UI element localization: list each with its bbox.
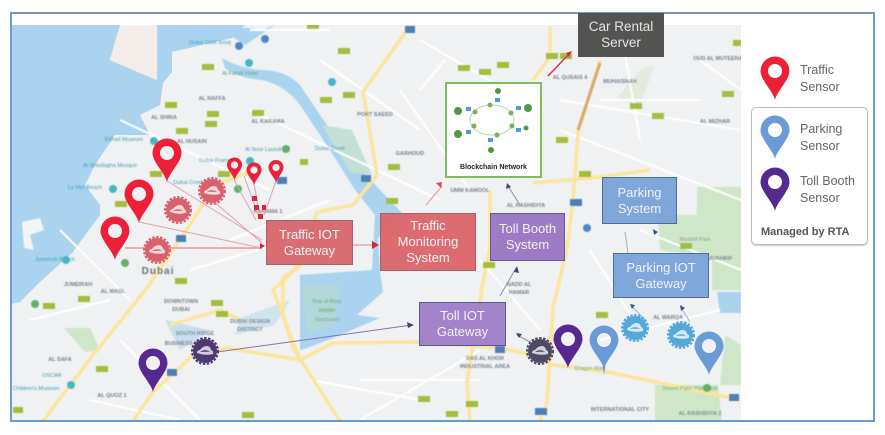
traffic pins [100, 56, 790, 260]
map background: La Mer Beach [68, 185, 102, 191]
map place labels: AL SAFA [48, 357, 72, 363]
box: parking IOT gateway: Parking IOT [626, 260, 696, 274]
legend: traffic sensor label: Sensor [800, 80, 840, 94]
legend: toll booth sensor label: Sensor [800, 191, 840, 205]
map background: Ras al Khor [313, 299, 342, 305]
map background: Dubai Gold Souq [189, 40, 231, 46]
map background: Desert Palm Polo Club [662, 386, 718, 392]
map background: Jumeirah Beach [35, 257, 75, 263]
legend: toll booth sensor label [800, 174, 855, 205]
box: traffic monitoring system: System [406, 250, 450, 265]
map place labels: AL RASHIDIYA 2 [679, 411, 721, 417]
map background: Dubai [142, 266, 174, 277]
arrow heads [252, 51, 572, 249]
map place labels: KARAMA 1 [254, 209, 282, 215]
map place labels: INTERNATIONAL CITY [591, 407, 650, 413]
map place labels: AL RAFFA [198, 96, 226, 102]
box: traffic IOT gateway [266, 220, 353, 265]
legend box [751, 107, 868, 245]
map background: Children's Museum [13, 386, 60, 392]
road shield markers [13, 23, 741, 418]
box: traffic monitoring system: Traffic [410, 218, 446, 233]
map place labels: GARHOUD [396, 151, 424, 157]
POI dots [62, 59, 336, 389]
map place labels: SOUTH RIDGE [176, 331, 214, 337]
parks [322, 125, 372, 175]
blue highway shields [167, 26, 739, 415]
map place labels: AL QUOZ 1 [97, 393, 127, 399]
map background: Sanctuary [315, 317, 340, 323]
map place labels: RAS AL KHOR [466, 356, 504, 362]
minor roads [30, 25, 741, 420]
map place labels: JUMEIRAH [64, 282, 92, 288]
box: blockchain network [445, 82, 542, 178]
toll pins [138, 168, 790, 392]
box: parking system: Parking [617, 184, 662, 200]
box: car rental server [578, 13, 664, 57]
map place labels: AL WARQA [653, 315, 683, 321]
box: car rental server: Car Rental [589, 19, 653, 34]
map place labels: AL RASHIDIYA [507, 203, 545, 209]
box: traffic IOT gateway: Gateway [284, 242, 335, 258]
major roads [43, 27, 732, 421]
map background: Al Shindagha Mosque [83, 163, 137, 169]
map place labels: BUSINESS BAY [165, 341, 206, 347]
legend: traffic sensor label: Traffic [800, 63, 834, 77]
map background: Dubai Creek Park [173, 180, 217, 186]
map background: Etihad Museum [105, 137, 144, 143]
map place labels: AL KARAMA [251, 119, 285, 125]
map place labels: DUBAI DESIGN [230, 319, 270, 325]
box: car rental server: Server [601, 35, 641, 50]
box: toll booth system: System [506, 237, 549, 252]
box: toll IOT gateway: Toll IOT [440, 308, 485, 323]
box: toll IOT gateway: Gateway [437, 324, 488, 339]
map background: Wildlife [318, 308, 336, 314]
map background: Dragon Mart [575, 366, 606, 372]
map place labels: PORT SAEED [357, 112, 393, 118]
box: parking IOT gateway [613, 253, 709, 298]
map place labels: INDUSTRIAL AREA [460, 364, 510, 370]
map background: Al Noor Laundry [245, 147, 285, 153]
box: toll booth system [490, 213, 565, 261]
map place labels: DUBAI [172, 307, 190, 313]
map background: UAE University [632, 201, 669, 207]
box: parking system [602, 177, 677, 224]
parking pins [590, 116, 790, 375]
map place labels: AL WASL [101, 289, 126, 295]
box: parking IOT gateway: Gateway [635, 276, 687, 290]
arrows [125, 53, 690, 352]
map background: Al Fahidi Hotel [222, 71, 258, 77]
sensor hubs [144, 178, 225, 263]
box: toll booth system: Toll Booth [499, 221, 556, 236]
map place labels: AL QUSAIS 4 [553, 75, 588, 81]
legend: parking sensor label: Sensor [800, 139, 840, 153]
water: creek [222, 58, 402, 350]
legend: parking sensor label: Parking [800, 122, 842, 136]
box: toll IOT gateway [419, 302, 506, 346]
box: parking system: System [618, 200, 661, 216]
map place labels: HAMAR [509, 290, 529, 296]
legend: parking sensor label [800, 122, 842, 153]
map place labels: NADD AL [507, 282, 532, 288]
map background: Dubai Creek [315, 146, 346, 152]
map place labels: MUHAISNAH [603, 79, 637, 85]
map place labels [48, 56, 743, 417]
map background: Dubai Frame [199, 158, 231, 164]
map background [12, 25, 741, 420]
map background: OSCAR [42, 373, 62, 379]
map place labels: UMM RAMOOL [450, 188, 490, 194]
map place labels: MUSHRIF [707, 256, 733, 262]
map place labels: AL SHINA [151, 115, 177, 121]
box: traffic IOT gateway: Traffic IOT [279, 226, 340, 242]
map place labels: AL MIZHAR [700, 119, 730, 125]
legend: toll booth sensor label: Toll Booth [800, 174, 855, 188]
box: traffic monitoring system: Monitoring [398, 234, 458, 249]
legend: traffic sensor label [800, 63, 840, 94]
map place labels: DISTRICT [237, 327, 263, 333]
legend: managed by RTA: Managed by RTA [761, 226, 849, 238]
map background: Mushrif Park [680, 237, 711, 243]
water: gulf [11, 25, 245, 304]
box: traffic monitoring system [380, 213, 476, 271]
map place labels: DOWNTOWN [164, 299, 198, 305]
map place labels: AL HUSAIN [177, 139, 207, 145]
box: blockchain network: Blockchain Network [460, 164, 527, 171]
